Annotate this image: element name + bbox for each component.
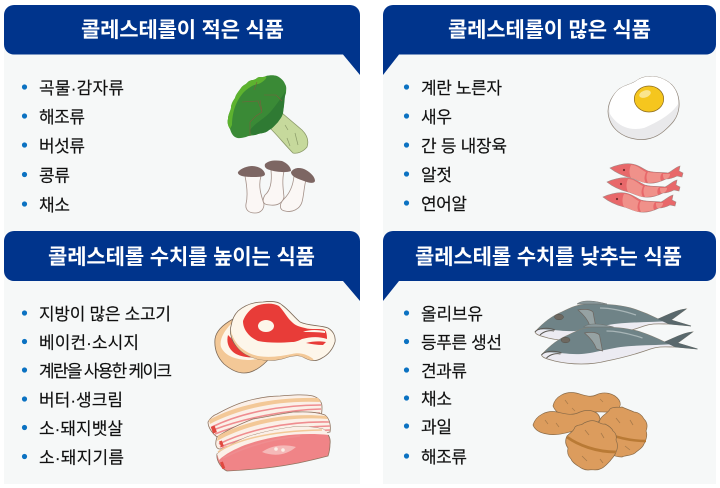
panel: foods lowering cholesterol — [383, 231, 716, 484]
heading: 콜레스테롤 수치를 높이는 식품 — [48, 246, 315, 269]
panel: low cholesterol foods — [4, 5, 360, 235]
panel: high cholesterol foods — [383, 5, 716, 235]
icon: fried egg — [608, 76, 679, 140]
food list: 채소 — [39, 196, 70, 215]
food list: 버터·생크림 — [39, 391, 123, 410]
food list: 새우 — [421, 108, 452, 127]
icon: beef steaks — [215, 301, 335, 373]
food list: 과일 — [421, 418, 452, 437]
food list: 간 등 내장육 — [421, 137, 507, 156]
icon: mushrooms — [238, 160, 315, 213]
icon: shrimp — [603, 164, 683, 212]
food list: 견과류 — [421, 362, 467, 381]
food list: 소·돼지기름 — [39, 448, 124, 468]
icon: broccoli — [228, 75, 308, 153]
food list — [22, 305, 172, 468]
food list: 등푸른 생선 — [421, 334, 502, 352]
food list: 알젓 — [421, 166, 452, 185]
panel: foods raising cholesterol — [4, 231, 360, 484]
icon: pork belly — [208, 395, 330, 471]
food list: 베이컨·소시지 — [39, 334, 139, 352]
food list: 계란 노른자 — [421, 79, 502, 98]
food list: 계란을 사용한 케이크 — [39, 362, 172, 381]
food list: 해조류 — [39, 108, 85, 127]
food list: 채소 — [421, 390, 452, 409]
food list — [22, 79, 124, 215]
food list: 콩류 — [39, 166, 70, 186]
food list: 곡물·감자류 — [39, 79, 124, 98]
icon: peanuts and walnuts — [533, 393, 647, 470]
food list: 지방이 많은 소고기 — [39, 305, 171, 324]
heading: 콜레스테롤이 많은 식품 — [448, 19, 651, 42]
heading: 콜레스테롤 수치를 낮추는 식품 — [415, 246, 682, 269]
food list: 해조류 — [421, 448, 467, 467]
food list — [404, 79, 507, 214]
food list: 소·돼지뱃살 — [39, 420, 123, 438]
food list: 버섯류 — [39, 137, 85, 156]
food list: 연어알 — [421, 195, 467, 214]
icon: mackerel — [535, 301, 698, 364]
food list: 올리브유 — [421, 305, 483, 324]
heading: 콜레스테롤이 적은 식품 — [81, 19, 284, 42]
food list — [404, 305, 502, 467]
